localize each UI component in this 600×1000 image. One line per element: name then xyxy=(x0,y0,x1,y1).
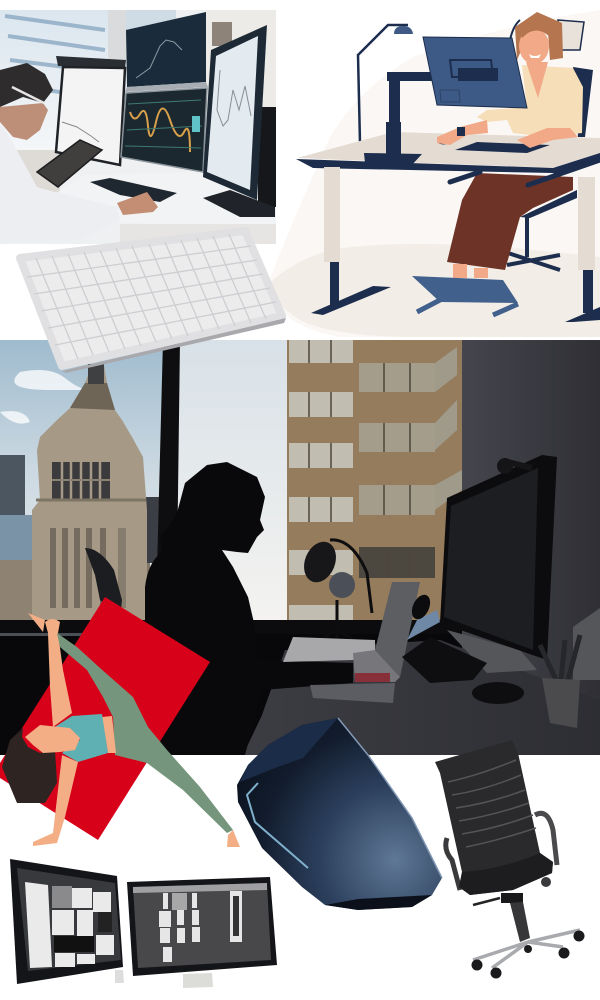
photo: trader at multiple monitors xyxy=(0,10,276,244)
green leggings xyxy=(57,633,233,833)
desk top xyxy=(296,132,600,185)
woman head xyxy=(515,12,563,64)
woman arms and hands xyxy=(437,120,578,148)
trousers xyxy=(447,173,573,270)
raised foot xyxy=(28,613,45,632)
footrest xyxy=(412,276,518,315)
monitor xyxy=(423,37,527,108)
illustration: woman at standing desk xyxy=(268,10,600,337)
face and shoulder xyxy=(25,725,80,753)
background blob xyxy=(268,10,600,337)
black leather office chair xyxy=(435,740,584,978)
hair xyxy=(2,728,57,803)
desk keyboard xyxy=(90,178,177,202)
computer monitors pair xyxy=(10,859,277,988)
computer mouse on desk xyxy=(472,682,524,704)
paper on desk xyxy=(283,637,375,662)
plant and pot xyxy=(540,608,600,728)
tower building xyxy=(32,364,147,620)
mouse and drawing tablet xyxy=(437,138,550,153)
monitor: top dark xyxy=(125,12,208,92)
front foot xyxy=(227,830,240,847)
man xyxy=(0,63,158,243)
distant buildings xyxy=(0,455,160,620)
monitor arm xyxy=(364,72,487,167)
vertical ergonomic mouse xyxy=(237,718,442,910)
lower arm xyxy=(33,755,78,846)
blue object xyxy=(407,610,440,640)
chair base xyxy=(507,190,577,270)
tablet xyxy=(37,140,102,187)
laptop xyxy=(353,582,420,682)
desk xyxy=(243,640,600,755)
top xyxy=(53,714,108,762)
desk legs xyxy=(311,167,600,322)
desk xyxy=(45,172,276,232)
dark wall right xyxy=(462,340,600,705)
notebook xyxy=(310,683,395,703)
sky window xyxy=(0,340,165,625)
window pillar xyxy=(157,340,180,570)
tan building xyxy=(287,340,463,625)
monitor: left white xyxy=(56,56,126,165)
midriff xyxy=(102,716,116,753)
woman torso xyxy=(477,62,583,137)
right monitor xyxy=(127,877,277,988)
raised arm xyxy=(45,619,72,727)
window sill xyxy=(0,620,460,634)
chair headrest and back xyxy=(510,20,593,137)
monitor: right xyxy=(203,25,276,217)
photo: woman silhouette at office desk xyxy=(0,340,600,755)
woman silhouette xyxy=(145,462,353,755)
office chair back xyxy=(85,548,122,620)
yoga mat xyxy=(0,597,210,840)
lamp xyxy=(338,25,413,153)
microphone and pop filter xyxy=(298,537,372,650)
keyboard xyxy=(20,231,286,373)
black keyboard xyxy=(402,637,487,683)
monitor on desk xyxy=(440,455,557,673)
monitor: middle chart xyxy=(121,88,207,172)
feet xyxy=(453,264,488,278)
illustration: yoga woman on red mat xyxy=(0,597,240,847)
left monitor xyxy=(10,859,124,984)
